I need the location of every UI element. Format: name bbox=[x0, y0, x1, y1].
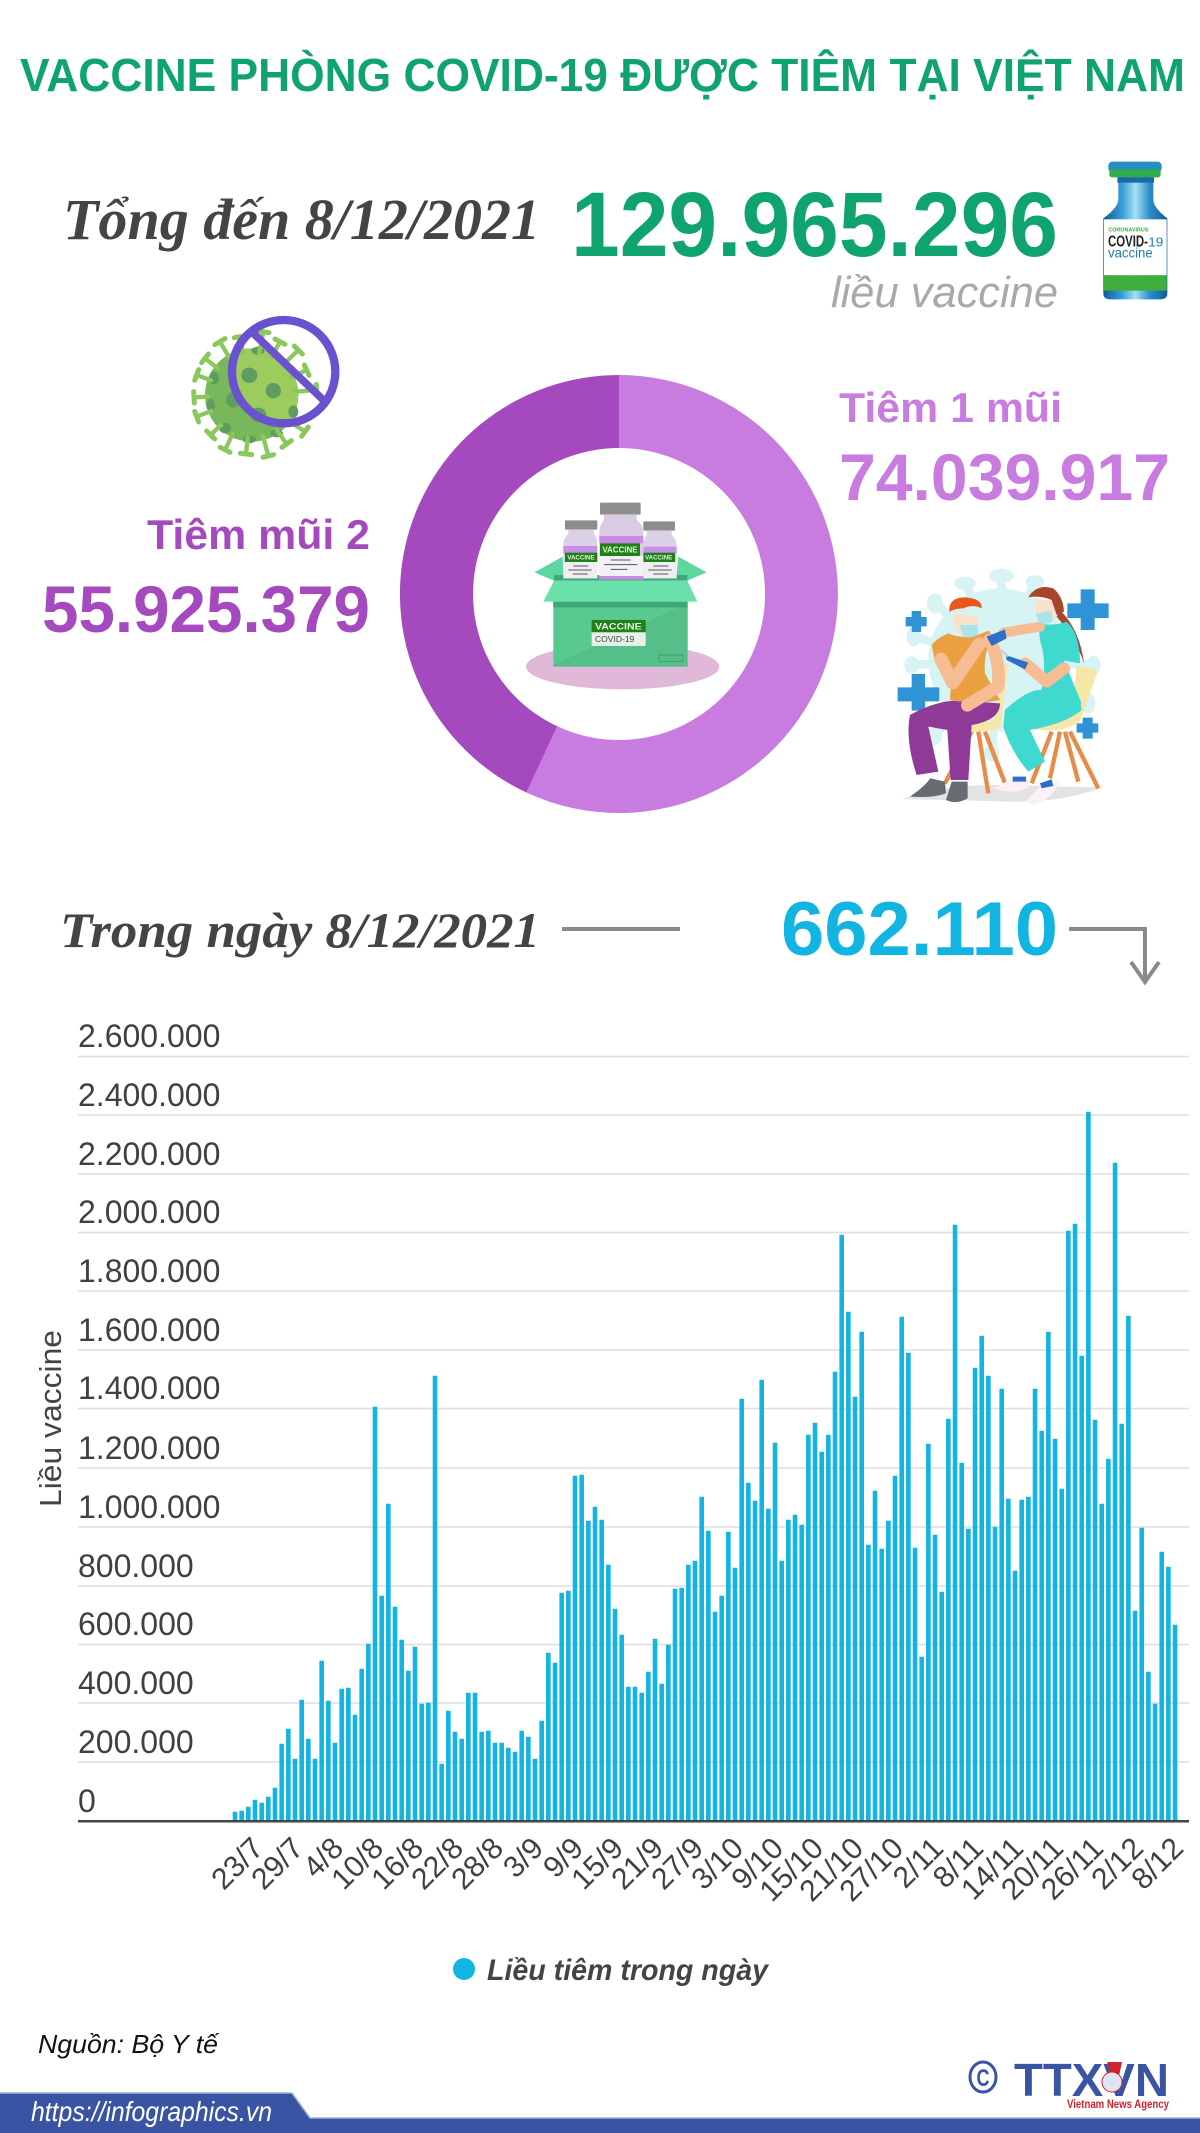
y axis labels: 1.600.000 bbox=[78, 1312, 220, 1348]
y axis labels: 1.400.000 bbox=[78, 1370, 220, 1406]
logo: TTXVN: C bbox=[976, 2065, 990, 2092]
y axis labels: 1.800.000 bbox=[78, 1253, 220, 1289]
x axis labels: 21/10 bbox=[794, 1832, 870, 1908]
label bbox=[1104, 219, 1167, 275]
x axis labels: 3/10 bbox=[685, 1832, 750, 1896]
x axis labels: 2/11 bbox=[887, 1832, 950, 1895]
y axis title: Liều vaccine bbox=[33, 1330, 68, 1507]
y axis labels: 1.200.000 bbox=[78, 1430, 220, 1466]
icon: nurse vaccinating patient bbox=[898, 569, 1109, 806]
box label bbox=[592, 620, 646, 646]
x axis labels: 20/11 bbox=[995, 1832, 1070, 1906]
x axis labels: 21/9 bbox=[605, 1832, 670, 1896]
logo: TTXVN: TTXVN bbox=[1014, 2054, 1169, 2106]
x axis labels: 28/8 bbox=[445, 1832, 510, 1896]
first dose number: 74.039.917 bbox=[839, 440, 1170, 514]
first dose heading: Tiêm 1 mũi bbox=[839, 384, 1062, 431]
pale virus backdrop bbox=[904, 569, 1101, 761]
bars bbox=[233, 1112, 1177, 1821]
footer band bbox=[0, 2093, 1200, 2133]
chart: daily vaccine doses bbox=[33, 1018, 1190, 1987]
prohibition ring bbox=[232, 320, 335, 423]
connector line bbox=[562, 927, 680, 931]
x axis labels: 15/9 bbox=[565, 1832, 630, 1896]
x axis labels: 15/10 bbox=[754, 1832, 830, 1908]
left vial bbox=[563, 520, 597, 578]
patient bbox=[908, 597, 1000, 802]
icon: vaccine vial: 19 bbox=[1148, 234, 1163, 249]
segment: second dose bbox=[400, 375, 619, 792]
x axis labels: 9/10 bbox=[725, 1832, 790, 1896]
second dose number: 55.925.379 bbox=[42, 572, 370, 646]
label: first dose bbox=[839, 384, 1170, 514]
x axis labels: 2/12 bbox=[1085, 1832, 1150, 1896]
y axis labels: 2.200.000 bbox=[78, 1136, 220, 1172]
icon: vaccine vial: COVID- bbox=[1108, 233, 1148, 250]
x axis line bbox=[78, 1820, 1189, 1822]
grid lines bbox=[78, 1056, 1189, 1762]
logo: TTXVN: Vietnam News Agency bbox=[1067, 2097, 1169, 2111]
y axis labels: 1.000.000 bbox=[78, 1489, 220, 1525]
x axis labels bbox=[205, 1832, 1190, 1908]
y axis labels: 600.000 bbox=[78, 1606, 194, 1642]
virus spikes bbox=[194, 332, 317, 456]
white cut-out above the slash bbox=[253, 313, 340, 400]
cap bbox=[1108, 162, 1162, 172]
x axis labels: 27/10 bbox=[834, 1832, 910, 1908]
y axis labels: 2.600.000 bbox=[78, 1018, 220, 1054]
x axis labels: 27/9 bbox=[645, 1832, 710, 1896]
icon: vaccine vial bbox=[1103, 162, 1167, 299]
segment: first dose bbox=[526, 375, 838, 813]
x axis labels: 4/8 bbox=[297, 1832, 350, 1884]
legend: Liều tiêm trong ngày bbox=[487, 1954, 769, 1987]
y axis labels: 2.000.000 bbox=[78, 1194, 220, 1230]
box label: VACCINE bbox=[595, 621, 642, 631]
spike caps bbox=[194, 331, 317, 457]
virus body bbox=[205, 348, 298, 442]
source note: Nguồn: Bộ Y tế bbox=[38, 2029, 220, 2059]
heading: total to date: Tổng đến 8/12/2021 bbox=[63, 187, 540, 252]
right vial bbox=[643, 521, 677, 578]
label: second dose bbox=[42, 511, 370, 646]
icon: virus with prohibition sign bbox=[194, 313, 340, 457]
x axis labels: 10/8 bbox=[325, 1832, 390, 1896]
centre vial: VACCINE bbox=[602, 544, 638, 554]
icon: vaccine vial: CORONAVIRUS bbox=[1108, 228, 1149, 234]
x axis labels: 23/7 bbox=[205, 1832, 270, 1896]
website: https://infographics.vn bbox=[31, 2096, 272, 2127]
daily doses number: 662.110 bbox=[781, 887, 1058, 972]
heading: daily figures: Trong ngày 8/12/2021 bbox=[60, 902, 540, 958]
chairs bbox=[945, 732, 1098, 793]
floor shadow bbox=[902, 785, 1103, 802]
y axis labels: 800.000 bbox=[78, 1548, 194, 1584]
nurse bbox=[987, 587, 1084, 806]
x axis labels: 29/7 bbox=[245, 1832, 310, 1896]
y axis labels: 200.000 bbox=[78, 1724, 194, 1760]
arrow: down bbox=[1069, 929, 1159, 982]
total doses number: 129.965.296 bbox=[571, 174, 1058, 276]
y axis labels bbox=[78, 1018, 220, 1819]
x axis labels: 26/11 bbox=[1035, 1832, 1110, 1906]
box front bbox=[553, 602, 688, 667]
centre vial bbox=[599, 503, 643, 579]
logo: TTXVN bbox=[970, 2054, 1169, 2111]
box label: COVID-19 bbox=[595, 634, 635, 644]
right vial: VACCINE bbox=[645, 555, 673, 562]
y axis labels: 0 bbox=[78, 1783, 96, 1819]
x axis labels: 14/11 bbox=[955, 1832, 1030, 1906]
x axis labels: 8/12 bbox=[1125, 1832, 1190, 1896]
x axis labels: 3/9 bbox=[497, 1832, 550, 1884]
x axis labels: 16/8 bbox=[365, 1832, 430, 1896]
left vial: VACCINE bbox=[567, 555, 595, 562]
plus icons bbox=[898, 589, 1109, 739]
icon: vaccine vial: vaccine bbox=[1108, 245, 1153, 261]
x axis labels: 22/8 bbox=[405, 1832, 470, 1896]
x axis labels: 9/9 bbox=[537, 1832, 590, 1884]
y axis labels: 400.000 bbox=[78, 1665, 194, 1701]
icon: vaccine box in donut bbox=[526, 503, 719, 689]
title: VACCINE PHÒNG COVID-19 ĐƯỢC TIÊM TẠI VIỆT NAM bbox=[20, 49, 1185, 101]
second dose heading: Tiêm mũi 2 bbox=[147, 511, 370, 558]
panel: doses donut chart bbox=[400, 375, 838, 813]
total doses unit: liều vaccine bbox=[831, 268, 1058, 317]
y axis labels: 2.400.000 bbox=[78, 1077, 220, 1113]
x axis labels: 8/11 bbox=[927, 1832, 990, 1895]
glass bbox=[1103, 176, 1167, 299]
